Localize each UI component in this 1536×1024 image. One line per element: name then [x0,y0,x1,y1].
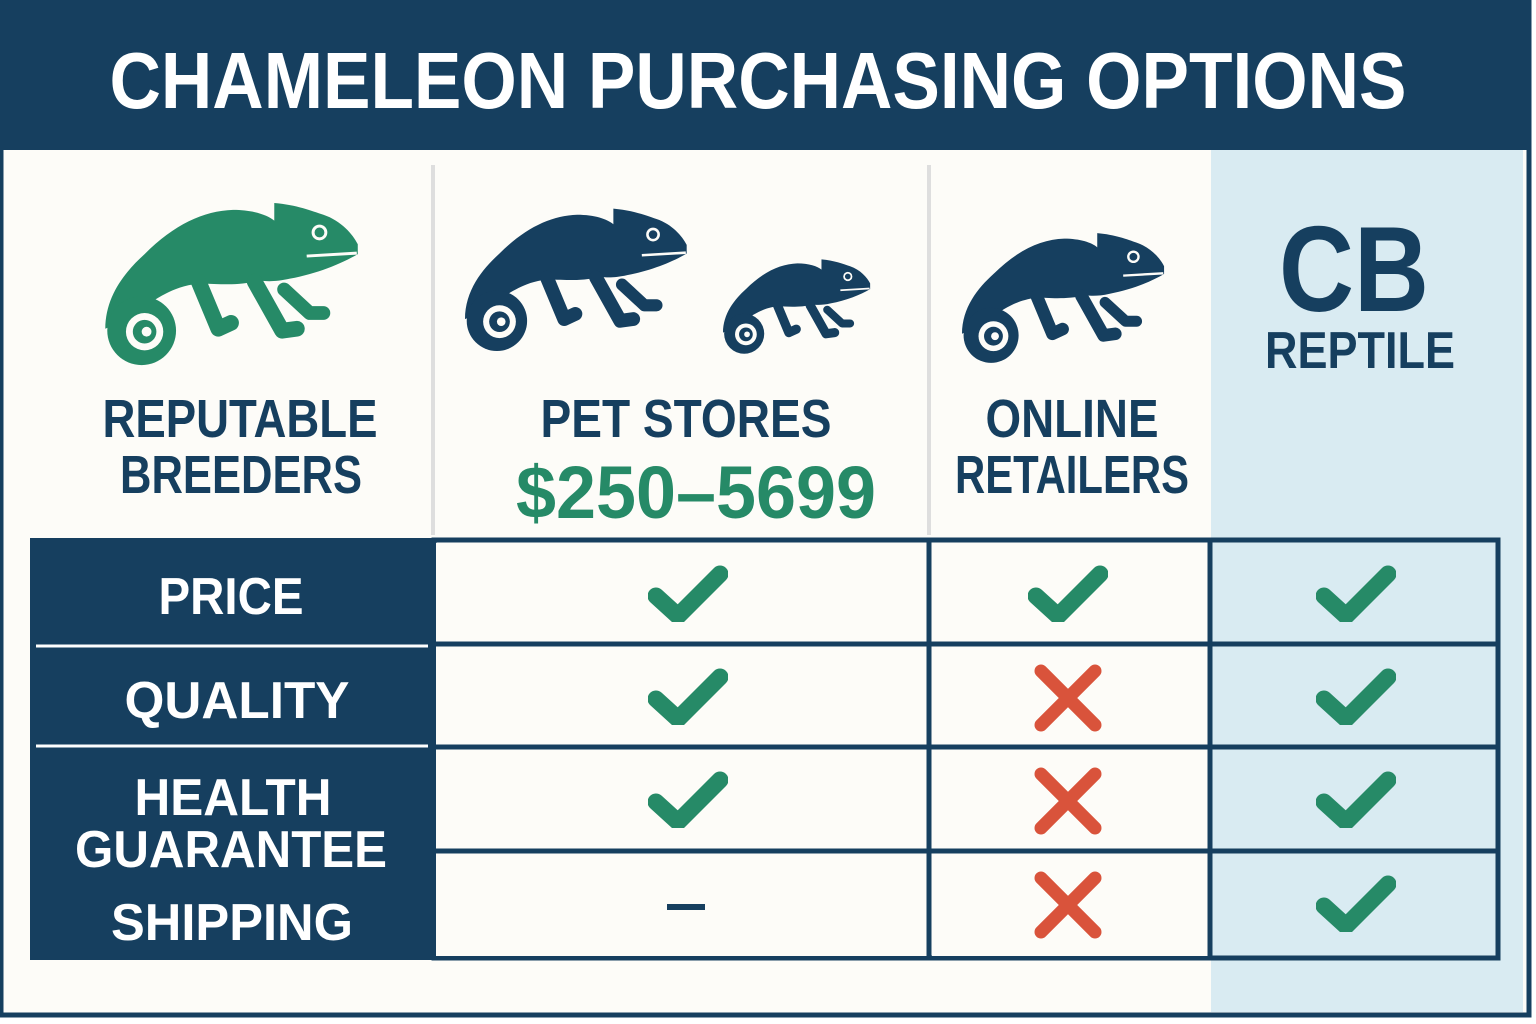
title: CHAMELEON PURCHASING OPTIONS [110,36,1406,125]
comparison table [30,538,1498,960]
price range: $250–5699 [516,451,876,534]
row labels: SHIPPING [111,894,353,952]
icon: green chameleon [105,203,358,366]
marks: online retailers [1028,566,1108,622]
row labels [75,568,387,952]
header: pet stores [465,209,876,534]
marks: CB reptile [1316,566,1396,622]
marks: pet stores [648,566,728,622]
row labels: HEALTH [134,769,332,827]
header: online retailers: RETAILERS [955,445,1189,505]
row labels: GUARANTEE [75,821,387,879]
highlight column: CB Reptile [1211,148,1523,1012]
header: reputable breeders: BREEDERS [120,445,362,505]
header: reputable breeders [102,203,378,505]
header: pet stores: PET STORES [540,389,832,449]
row labels: QUALITY [124,672,350,730]
header: CB reptile logo: CB [1279,201,1429,337]
header: online retailers [955,233,1189,505]
header: reputable breeders: REPUTABLE [102,389,378,449]
header: CB reptile logo: REPTILE [1265,322,1455,380]
column dividers [431,165,435,535]
title banner [0,0,1530,150]
row labels: PRICE [158,568,304,626]
icon: navy chameleon [962,233,1164,363]
header: online retailers: ONLINE [986,389,1158,449]
icon: two navy chameleons [465,209,870,354]
